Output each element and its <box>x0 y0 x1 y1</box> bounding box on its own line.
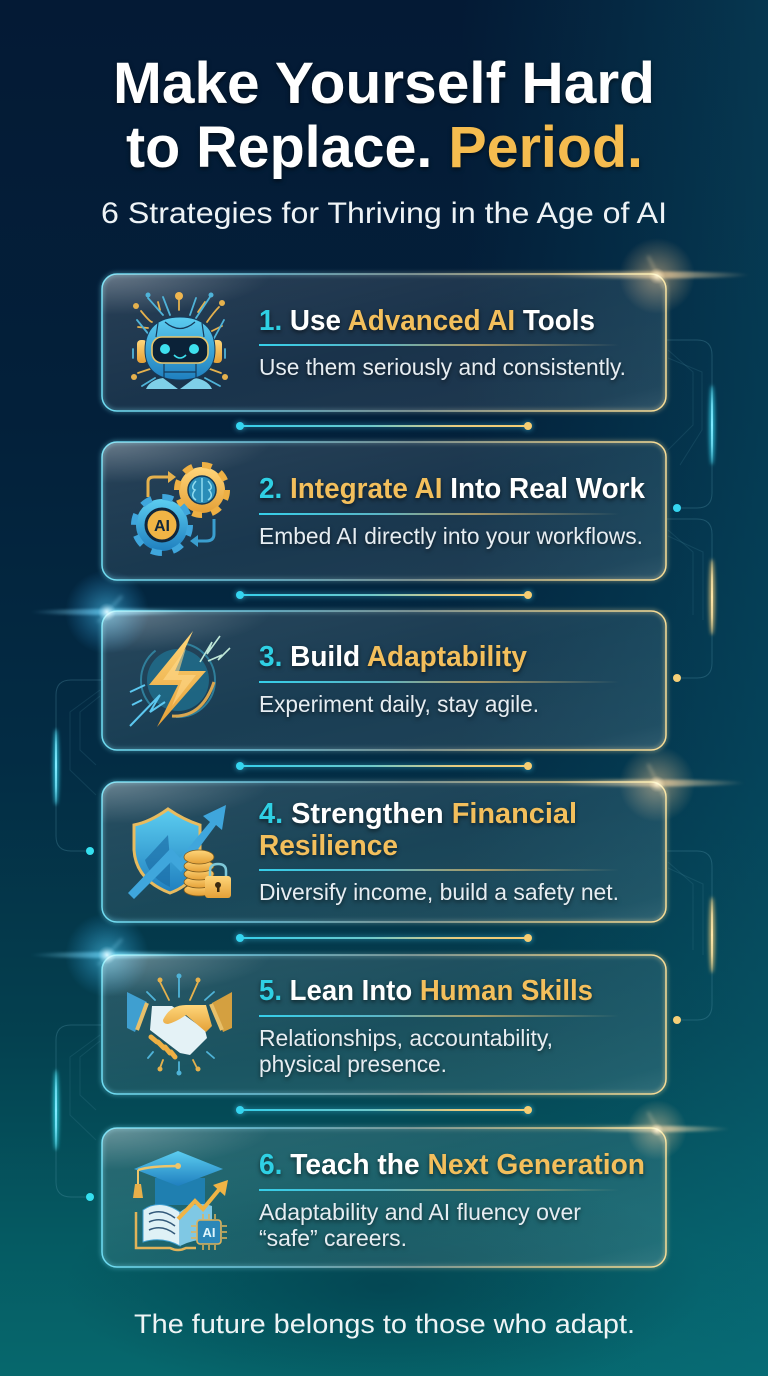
circuit traces: left side <box>53 680 101 1201</box>
icon: robot <box>131 292 228 389</box>
footer tagline: The future belongs to those who adapt. <box>134 1309 635 1339</box>
connector 1 <box>236 422 532 430</box>
connector 5 <box>236 1106 532 1114</box>
panel: strategy 4 <box>102 782 666 922</box>
panel: strategy 5 <box>102 955 666 1094</box>
description: physical presence. <box>259 1051 447 1077</box>
description: Experiment daily, stay agile. <box>259 691 539 717</box>
description: “safe” careers. <box>259 1225 407 1251</box>
icon: gears with brain and AI: AI <box>154 518 170 535</box>
heading <box>259 798 577 862</box>
divider <box>259 1015 619 1017</box>
title: to Replace. Period. <box>126 115 643 180</box>
description: Relationships, accountability, <box>259 1025 553 1051</box>
icon: graduation cap, book, growth arrow and AI chip <box>133 1151 228 1250</box>
circuit traces: right side upper <box>667 340 715 682</box>
divider <box>259 869 619 871</box>
heading: 4. Strengthen Financial <box>259 798 577 830</box>
connector 2 <box>236 591 532 599</box>
description: Use them seriously and consistently. <box>259 354 626 380</box>
panel: strategy 6 <box>102 1128 666 1267</box>
heading: 6. Teach the Next Generation <box>259 1149 645 1181</box>
divider <box>259 344 619 346</box>
divider <box>259 681 619 683</box>
icon: gears with brain and AI <box>134 465 227 553</box>
heading: 3. Build Adaptability <box>259 641 527 673</box>
panel: strategy 2 <box>102 442 666 580</box>
heading: 2. Integrate AI Into Real Work <box>259 473 646 505</box>
panel: strategy 3 <box>102 611 666 750</box>
icon: handshake <box>127 974 232 1076</box>
description: Adaptability and AI fluency over <box>259 1199 581 1225</box>
icon: graduation cap, book, growth arrow and AI chip: AI <box>202 1225 216 1240</box>
heading: 1. Use Advanced AI Tools <box>259 305 595 337</box>
icon: shield, arrow, coins and lock <box>128 805 231 899</box>
panel: strategy 1 <box>102 274 666 411</box>
divider <box>259 1189 619 1191</box>
connector 3 <box>236 762 532 770</box>
connector 4 <box>236 934 532 942</box>
circuit traces: right side lower <box>667 851 715 1024</box>
heading: Resilience <box>259 830 398 862</box>
description: Diversify income, build a safety net. <box>259 879 619 905</box>
title: Make Yourself Hard <box>113 51 655 116</box>
icon: lightning bolt <box>130 631 230 727</box>
title <box>113 51 655 180</box>
subtitle: 6 Strategies for Thriving in the Age of AI <box>101 197 667 230</box>
light flares <box>30 238 750 1160</box>
description <box>259 1199 581 1251</box>
divider <box>259 513 619 515</box>
heading: 5. Lean Into Human Skills <box>259 975 593 1007</box>
description: Embed AI directly into your workflows. <box>259 523 643 549</box>
description <box>259 1025 553 1077</box>
